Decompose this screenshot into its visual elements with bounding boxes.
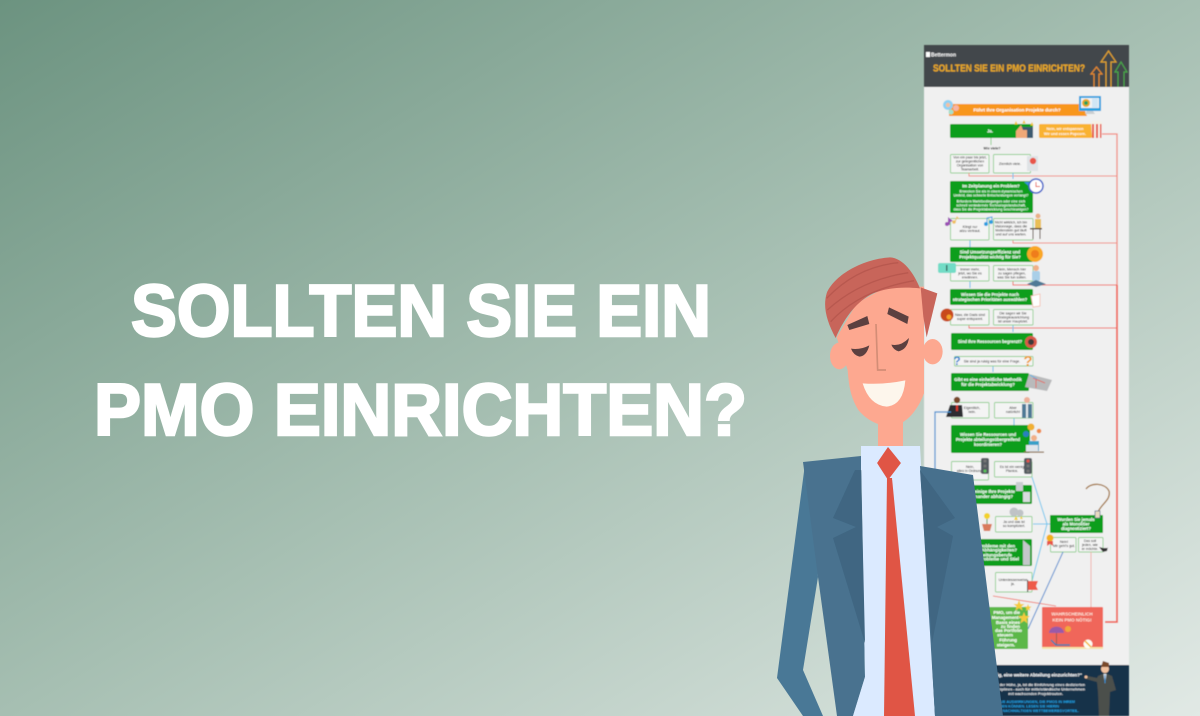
answer box: of course: Aber xyxy=(1009,406,1018,410)
result: PMO recommended: Basis eines xyxy=(996,620,1021,625)
poster footer: Ist Ihr Unternehmen fähig, eine weitere Abteilung einzurichten?" xyxy=(948,672,1082,678)
question: quality: Projektqualität wichtig für Sie? xyxy=(959,254,1021,260)
answer box: no: was Sie tun sollen. xyxy=(997,276,1027,280)
ears xyxy=(830,339,943,369)
neck xyxy=(878,415,903,446)
answer box: always more: jetzt, wo Sie es xyxy=(957,272,982,276)
answer box: sometimes: ja. xyxy=(1010,582,1015,586)
tie xyxy=(877,447,915,716)
eyebrows xyxy=(847,307,909,330)
question: bottlenecks: Probleme mit den xyxy=(978,544,1015,548)
jacket right side xyxy=(920,466,1003,716)
question: dependencies xyxy=(963,482,1032,504)
question: timing: dass Sie die Projektabwicklung beschleunigen? xyxy=(953,208,1029,212)
character: smiling businessman xyxy=(777,257,1003,716)
answer box: complicated: Ja und das ist xyxy=(1003,520,1025,524)
shirt xyxy=(853,446,935,716)
result: PMO recommended: zu finden xyxy=(1001,624,1020,629)
answer box: sometimes xyxy=(996,572,1032,592)
answer box: strategy: Strategieausrichtung xyxy=(997,316,1029,320)
answer box: always more: erwähnen. xyxy=(962,276,978,280)
question bar: projects xyxy=(949,104,1087,116)
answer box: strategy: ist unser Hauptziel. xyxy=(998,320,1028,324)
result: no PMO needed xyxy=(1042,607,1103,649)
question: dependencies: voneinander abhängig? xyxy=(963,494,1013,499)
question: timing: schnell verändernde Technologielandschaft, xyxy=(956,204,1026,208)
question: monolith: diagnostiziert? xyxy=(1061,526,1091,531)
answer box: not really: Nicht wirklich, ich bin xyxy=(995,220,1027,224)
question: timing: Umfeld, das schnelle Entscheidungen verlangt? xyxy=(953,194,1029,198)
icon: presenter man xyxy=(1084,661,1116,716)
answer box: dads: Naw, die Dads sind xyxy=(955,313,985,317)
question: bottlenecks: probleme und Stiel xyxy=(979,556,1019,562)
question: timing xyxy=(950,181,1033,213)
question: timing: Im Zeitplanung ein Problem? xyxy=(962,184,1020,188)
icon: meditating person xyxy=(1027,265,1046,287)
poster footer: Wir sagen Ihnen, wo Sie auf der Höhe, ja, ist die Einführung eines dedizierten xyxy=(950,683,1086,687)
icon: medal xyxy=(1046,534,1054,546)
icon: traffic light red xyxy=(1024,458,1032,474)
icon: question marks xyxy=(953,353,1033,370)
answer box: planless xyxy=(994,462,1032,477)
answer box: question xyxy=(954,356,1033,366)
question: dependencies: Sind einige Ihre Projekte xyxy=(964,489,1016,494)
answer box: many: Ziemlich viele. xyxy=(999,162,1021,166)
icon: red flag xyxy=(1027,580,1038,592)
answer box: whatever: Das soll xyxy=(1084,539,1096,543)
question: resources xyxy=(951,333,1037,350)
icon: bearded man xyxy=(946,397,963,417)
question: monolith: als Monolitier xyxy=(1062,522,1090,526)
icon: stars xyxy=(1014,600,1032,624)
question: bottlenecks xyxy=(970,539,1032,566)
icon: question marks: ? xyxy=(953,354,961,368)
answer box: complicated xyxy=(996,516,1032,532)
question: methodology: Gibt es eine einheitliche Methodik xyxy=(954,377,1022,382)
closed eyes xyxy=(851,338,909,357)
poster header: SOLLTEN SIE EIN PMO EINRICHTEN? xyxy=(933,64,1085,74)
result: PMO recommended: steuern xyxy=(997,632,1013,638)
answer box: all fine: alles in Ordnung. xyxy=(957,469,983,473)
answer box: few: zur gelegentlichen xyxy=(956,160,984,164)
question: strategic priorities xyxy=(950,289,1033,305)
icon: person at desk xyxy=(1030,214,1042,239)
answer box: few: Organisation von xyxy=(957,164,983,168)
answer box: planless: Planlos. xyxy=(1006,469,1018,473)
icon: cloud xyxy=(1010,508,1024,520)
question: quality xyxy=(950,246,1043,262)
hair xyxy=(825,257,937,338)
question: bottlenecks: Leitungsberufe xyxy=(980,552,1013,558)
answer box: whatever: jeden, wie xyxy=(1081,543,1098,547)
question: coordination: koordinieren? xyxy=(974,442,1002,447)
result: PMO recommended: steigern. xyxy=(997,642,1015,648)
answer box: no worries: Mir geht's gut. xyxy=(1053,544,1075,548)
question: methodology: für die Projektabwicklung? xyxy=(961,382,1015,387)
answer box: all fine: Nein, xyxy=(966,465,974,469)
answer: yes xyxy=(950,120,1034,138)
smile xyxy=(863,380,905,407)
icon: traffic light green xyxy=(981,458,989,474)
result: no PMO needed: WAHRSCHEINLICH xyxy=(1051,612,1093,616)
poster footer: UNTERNEHMEN HABEN KÖNNEN. LESEN SIE HIERIN xyxy=(964,704,1059,708)
connector lines: green xyxy=(990,138,992,145)
answer box: many xyxy=(994,154,1038,173)
question: strategic priorities: strategischen Prioritäten auswählen? xyxy=(953,297,1028,302)
nose xyxy=(876,324,886,370)
icon: growth arrows xyxy=(1091,51,1127,87)
answer box: actually no: Eigentlich, xyxy=(964,406,980,410)
connector lines: light blue xyxy=(1032,477,1050,581)
question: coordination: Projekte abteilungsübergreifend xyxy=(956,437,1021,442)
jacket lapels xyxy=(833,470,955,643)
answer box: dads: super entspannt. xyxy=(957,317,983,321)
answer box: planless: Es ist ein wenig xyxy=(1000,465,1024,469)
collar xyxy=(861,446,920,480)
answer box: whatever: er möchte. xyxy=(1082,547,1098,551)
text: how many: Wie viele? xyxy=(983,146,1001,150)
poster footer: ERFAHREN SIE MEHR ÜBER DIE GENAUE AUSWIRKUNGEN, DIE PMOS IN IHREM xyxy=(931,699,1075,704)
poster footer: Teams sehr wichtig und Disziplinen - auch für mittelständische Unternehmen xyxy=(950,688,1086,692)
answer box: familiar: Klingt nur xyxy=(963,225,978,229)
infographic poster xyxy=(924,45,1129,716)
answer: no, popcorn: Wir und essen Popcorn. xyxy=(1044,132,1086,136)
icon: map board xyxy=(1025,374,1052,391)
answer box: actually no xyxy=(952,402,989,418)
answer box: dads xyxy=(950,310,989,325)
answer box: whatever xyxy=(1078,538,1103,552)
answer box: of course: natürlich! xyxy=(1006,410,1020,414)
question: coordination: Wissen Sie Ressourcen und xyxy=(960,432,1016,437)
answer box: not really: Visionnage, dass die xyxy=(995,224,1027,228)
answer box: always more xyxy=(950,266,989,281)
answer box: no worries: Nein! xyxy=(1060,540,1068,544)
answer box: no: zu sagen pflegen, xyxy=(998,272,1026,276)
icon: beach umbrella and lounger xyxy=(1049,626,1092,648)
icon: laptop worker xyxy=(1023,424,1044,453)
icon: flower pot xyxy=(982,513,992,531)
answer box: familiar: allzu vertraut. xyxy=(959,229,981,233)
answer box: not really: Meilenstein gut läuft xyxy=(995,228,1027,232)
poster header: Bettermon xyxy=(931,52,956,58)
icon: alert bubble xyxy=(938,263,956,273)
result: PMO recommended: PMO, um die xyxy=(993,610,1021,615)
icon: clock xyxy=(1024,179,1043,193)
icon: bat xyxy=(1099,547,1108,552)
title: PMO EINRICHTEN? xyxy=(94,370,747,451)
poster footer: UNSERE PMOS UND SEINEN NACHHALTIGEN WETTBEWERBSVORTEIL. xyxy=(950,709,1079,713)
face xyxy=(837,287,924,426)
question: monolith xyxy=(1050,515,1103,533)
answer box: strategy xyxy=(994,310,1033,325)
icon: monitor xyxy=(1079,96,1101,114)
connector: blue line to left xyxy=(935,412,951,480)
result: PMO recommended: Führung xyxy=(999,638,1017,642)
head xyxy=(825,257,943,426)
answer box: few: Von ein paar bis jetzt, xyxy=(953,156,987,160)
icon: gears xyxy=(943,100,959,114)
question: bottlenecks: Abhängigkeiten? xyxy=(981,548,1017,552)
icon: sunset badge xyxy=(940,308,954,322)
answer box: few: Teamarbeit. xyxy=(961,168,979,172)
icon: question marks: ? xyxy=(1023,353,1033,370)
answer box: complicated: so kompliziert. xyxy=(1003,524,1025,528)
connector arrows: blue xyxy=(970,173,1014,425)
icon: whip question mark xyxy=(1086,484,1109,518)
question: strategic priorities: Wissen Sie die Projekte nach xyxy=(961,292,1019,297)
answer: no, popcorn: Nein, wir entspannen xyxy=(1046,127,1084,131)
answer box: sometimes: Unterdessenweise xyxy=(999,578,1027,582)
icon: document xyxy=(1031,294,1040,307)
question: resources: Sind Ihre Ressourcen begrenzt? xyxy=(958,339,1023,344)
answer box: question: Sie sind ja ruisig was für eine Frage. xyxy=(964,360,1020,364)
answer box: always more: Immer mehr, xyxy=(960,268,980,272)
poster footer xyxy=(924,661,1129,716)
title: SOLLTEN SIE EIN xyxy=(131,271,711,352)
answer box: familiar xyxy=(950,218,989,240)
result: PMO recommended: Management- xyxy=(992,615,1021,620)
answer box: of course xyxy=(994,402,1033,418)
question: timing: Erfordern Marktbedingungen oder eine sich xyxy=(957,200,1025,204)
icon: man in vest xyxy=(1022,397,1032,418)
answer box: not really: und auf uns warten. xyxy=(996,232,1026,236)
answer box: no: Nein, Mensch hier xyxy=(998,268,1027,272)
question: monolith: Wurden Sie jemals xyxy=(1057,517,1095,522)
result: PMO recommended xyxy=(970,607,1028,649)
left sleeve xyxy=(777,464,823,716)
answer box: few xyxy=(950,154,989,173)
answer: no, popcorn xyxy=(1039,120,1102,138)
question: methodology xyxy=(951,373,1029,391)
connector lines: red xyxy=(969,134,1117,622)
poster footer: mit wachsenden Projektrouten. xyxy=(1008,692,1063,696)
answer box: all fine xyxy=(952,462,988,480)
result: no PMO needed: KEIN PMO NÖTIG! xyxy=(1052,616,1092,622)
answer box: strategy: Die sagen wir Sie xyxy=(999,312,1027,316)
icon: music notes xyxy=(945,217,993,226)
title xyxy=(94,271,747,451)
left jacket front xyxy=(803,456,865,716)
connector lines: lower xyxy=(993,552,1091,629)
answer box: not really xyxy=(994,218,1033,240)
question bar: projects: Führt Ihre Organisation Projekte durch? xyxy=(973,108,1061,113)
answer box: actually no: nein. xyxy=(968,410,976,414)
question: quality: Sind Umsetzungseffizienz und xyxy=(960,250,1021,254)
answer box: no worries xyxy=(1050,538,1076,552)
poster header xyxy=(924,45,1129,87)
answer: yes: Ja. xyxy=(987,128,993,134)
question: timing: Erwecken Sie als in einem dynamischen xyxy=(959,190,1023,194)
answer box: no xyxy=(994,266,1033,281)
result: PMO recommended: das Portfolio xyxy=(995,628,1022,633)
question: coordination xyxy=(951,425,1030,453)
